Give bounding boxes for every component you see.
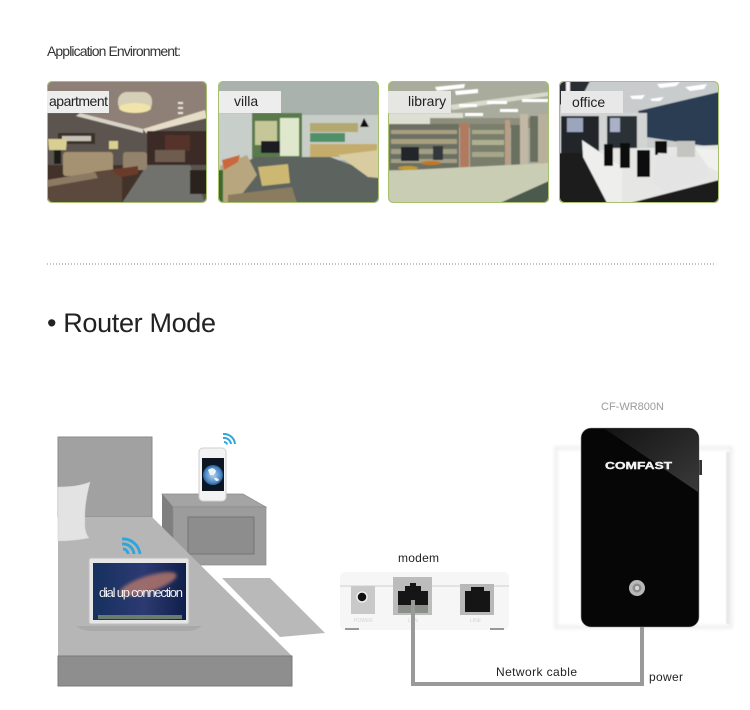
connector: network cable <box>413 600 642 684</box>
icon: laptop with wifi <box>76 539 202 631</box>
device: router <box>556 428 731 627</box>
label: library <box>388 91 451 113</box>
panel: application environment photos <box>47 81 719 203</box>
label: apartment <box>47 91 109 113</box>
illustration: rug <box>222 578 325 637</box>
photo: library <box>388 81 549 203</box>
label: villa <box>219 91 281 113</box>
label: villa: villa <box>234 93 258 109</box>
icon: laptop wifi signal <box>122 539 140 554</box>
label: router model: CF-WR800N <box>601 401 664 413</box>
device: modem <box>340 572 509 630</box>
heading: application environment: Application Environment: <box>47 43 181 59</box>
device: modem: LAN <box>408 618 418 624</box>
icon: power button <box>629 580 645 596</box>
label: library: library <box>408 93 446 109</box>
photo: apartment <box>47 81 207 203</box>
logo: comfast: COMFAST <box>605 460 673 472</box>
illustration: nightstand <box>162 494 266 565</box>
icon: phone with wifi <box>199 434 235 501</box>
label: apartment: apartment <box>49 93 108 109</box>
device: modem: LINE <box>470 618 482 624</box>
diagram: router mode <box>58 401 731 686</box>
illustration: bed <box>58 437 292 686</box>
label: office: office <box>572 94 605 110</box>
label: network cable: Network cable <box>496 665 577 679</box>
label: office <box>561 91 623 113</box>
label: modem: modem <box>398 551 439 565</box>
photo: villa <box>218 81 379 203</box>
heading: router mode: • Router Mode <box>47 308 216 338</box>
text: dial up connection: dial up connection <box>99 585 183 600</box>
label: power: power <box>649 670 683 684</box>
photo: office <box>559 81 719 203</box>
device: modem: POWER <box>354 618 373 624</box>
icon: phone wifi signal <box>223 434 235 444</box>
